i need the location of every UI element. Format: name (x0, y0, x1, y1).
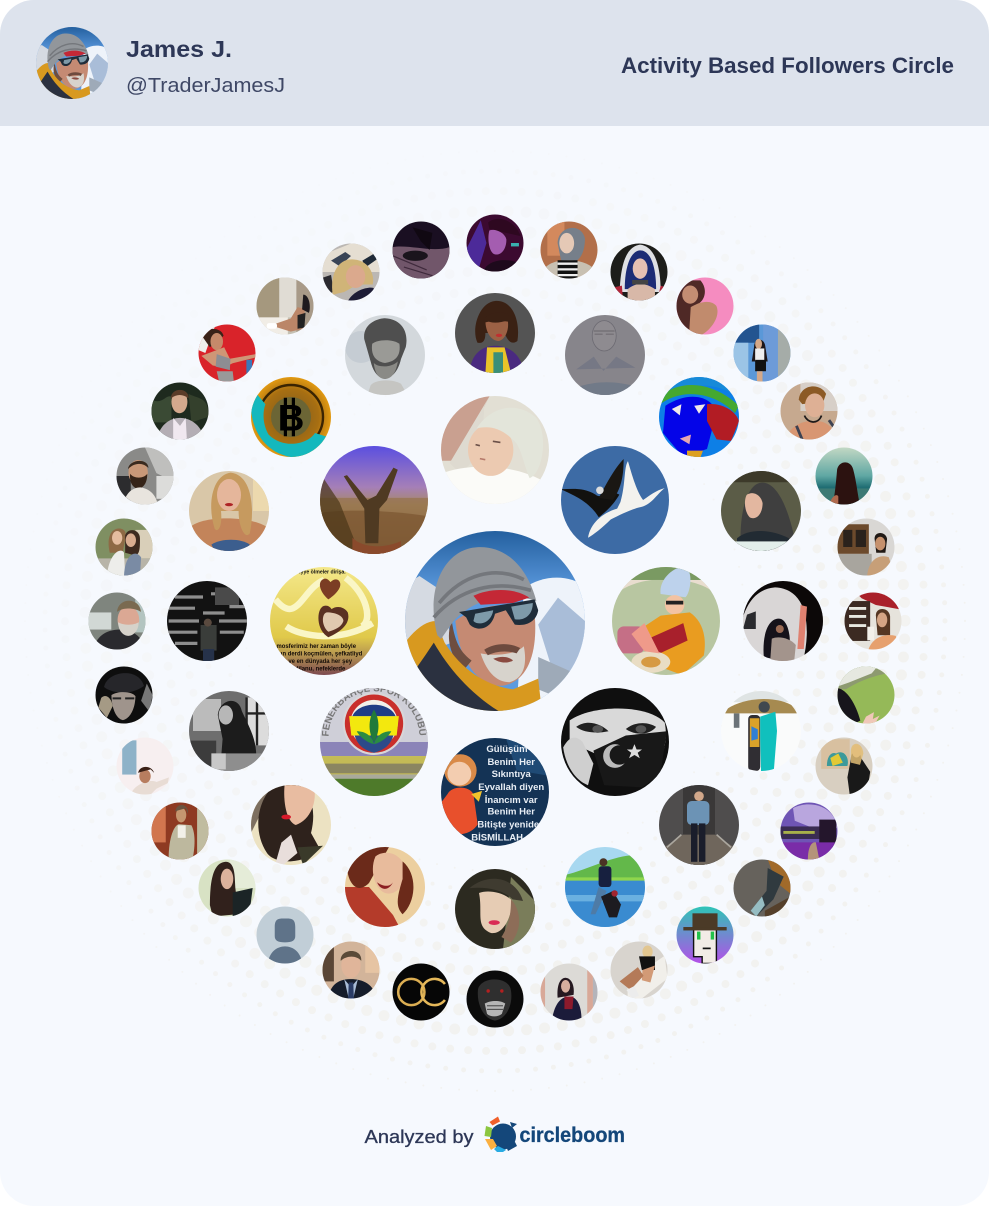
avatar: black and white woman with mask (561, 688, 669, 796)
avatar: bitcoin coin (251, 377, 331, 457)
avatar: golden rings logo (392, 964, 450, 1020)
avatar: yellow heart poster with text: ın derdi koçmülen, şefkatliyd (281, 652, 363, 658)
avatar: girl with dark hair (721, 471, 801, 551)
avatar: man with cap and beard (88, 592, 146, 650)
avatar: purple night scene (780, 802, 838, 860)
avatar: doll with Turkish poem text: Sıkıntıya (492, 769, 531, 780)
avatar: woman by blue curtain (734, 324, 790, 382)
avatar: blonde woman (189, 471, 269, 551)
avatar: grey textured boot (734, 860, 790, 916)
avatar: woman in beige blazer (152, 802, 208, 860)
avatar: woman in red cafe (844, 592, 902, 650)
avatar: woman with red lipstick (251, 785, 331, 865)
avatar: pixel art punk (676, 906, 734, 964)
avatar: yellow heart poster with text: ve en dünyada her şey (288, 659, 353, 665)
halftone dot rings background (132, 294, 966, 1092)
avatar: illustrated woman reading (612, 567, 720, 675)
avatar: man on motorbike (565, 847, 645, 927)
avatar: purple portrait (466, 214, 524, 272)
center avatar: James J. (405, 531, 585, 711)
text: circleboom wordmark: circleboom (520, 1124, 625, 1147)
avatar: girl with cap (455, 869, 535, 949)
avatar: woman facing the sea (816, 448, 872, 504)
avatar: football club crest: FENERBAHÇE SPOR KULÜBÜ (322, 688, 428, 736)
avatar: doll with Turkish poem text: Benim Her (487, 807, 535, 818)
avatar: woman with auburn hair (345, 847, 425, 927)
avatar: woman against red wall (198, 324, 256, 382)
avatar: woman at chalk wall (167, 581, 247, 661)
avatar: yellow heart poster with text: iyye ölmeler dirişa. (299, 569, 346, 575)
avatar: woman beside painting (816, 738, 872, 794)
avatar: tree at sunset (320, 446, 428, 554)
avatar: woman in black and white cafe (189, 691, 269, 771)
avatar: woman by window (256, 278, 314, 334)
avatar: football club crest (320, 688, 428, 796)
avatar: doll with Turkish poem text: BİSMİLLAH (471, 833, 523, 844)
avatar: blue-haired woman in hood (610, 244, 668, 300)
avatar: colourful painted face (659, 377, 739, 457)
avatar: blonde woman near plane (322, 244, 380, 300)
avatar: doll with Turkish poem text: Bitişte yeniden (477, 820, 545, 831)
avatar: man in elevator mirror (659, 785, 739, 865)
text: user handle: @TraderJamesJ (126, 75, 285, 97)
avatar: woman in grey hijab (540, 222, 598, 278)
avatar: doll with Turkish poem text: Gülüşüm ü (486, 744, 536, 755)
heading: chart title: Activity Based Followers Circle (621, 53, 954, 78)
avatar: marble statue (345, 315, 425, 395)
avatar: mirror selfie woman (540, 964, 598, 1020)
avatar: eagle and stork (561, 446, 669, 554)
avatar: bald man with beard (116, 448, 174, 504)
avatar: close-up dark eye (392, 222, 450, 278)
avatar: woman in dark room (838, 518, 894, 576)
avatar: woman with long dark hair (198, 860, 256, 916)
avatar: woman with updo (780, 382, 838, 440)
avatar: yellow heart poster with text (270, 567, 378, 675)
avatar: woman on pink background (676, 278, 734, 334)
avatar: doll with Turkish poem text: Eyvallah diyen (478, 782, 544, 793)
avatar: woman on grassy slope (838, 666, 894, 724)
avatar: grey man with glasses (565, 315, 645, 395)
avatar: default placeholder (256, 906, 314, 964)
avatar: yellow heart poster with text: mosferimiz her zaman böyle (276, 644, 357, 650)
avatar: dark-haired man portrait (96, 666, 152, 724)
icon: circleboom logo mark (484, 1116, 517, 1152)
avatar: woman on white chair (610, 942, 668, 998)
avatar: doll with Turkish poem text (441, 738, 549, 846)
avatar: yellow heart poster with text: dilanu, nefeklerde (295, 667, 346, 673)
avatar: two women (96, 518, 152, 576)
avatar: comic girl (455, 293, 535, 373)
avatar: doll with Turkish poem text: Benim Her (487, 757, 535, 768)
icon: header profile avatar (36, 27, 108, 99)
avatar: dark skull mask (466, 970, 524, 1028)
avatar: man in dark suit (322, 942, 380, 998)
heading: user name: James J. (126, 36, 232, 62)
avatar: snowboarder (722, 691, 800, 771)
avatar: woman selfie with dark arch (743, 581, 823, 661)
avatar: bitcoin coin: B (278, 398, 304, 439)
avatar: doll with Turkish poem text: İnancım var (485, 795, 538, 806)
avatar: young man in grey blazer (152, 382, 208, 440)
avatar: woman against white wall (116, 738, 174, 794)
avatar: baby (441, 396, 549, 504)
text: analyzed by: Analyzed by (364, 1127, 474, 1147)
